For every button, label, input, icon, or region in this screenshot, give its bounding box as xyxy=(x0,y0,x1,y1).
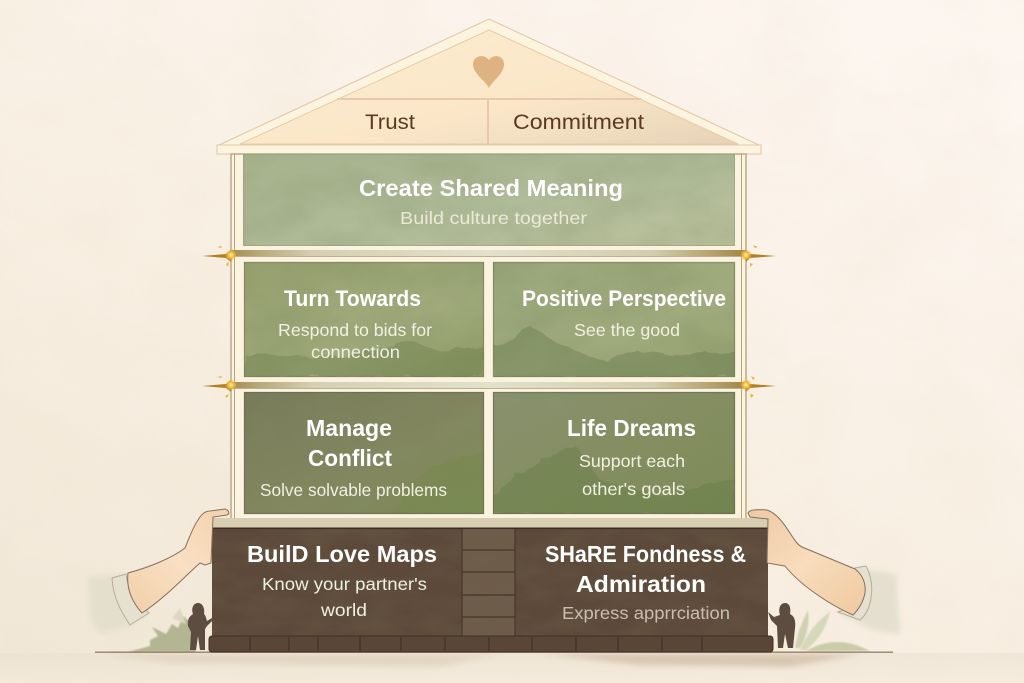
right arm and hand xyxy=(748,510,900,634)
panel: create shared meaning xyxy=(243,154,735,246)
label: commitment: Commitment xyxy=(513,110,644,134)
beam: upper xyxy=(231,250,746,257)
left sleeve xyxy=(88,574,150,634)
wall frame xyxy=(231,154,746,520)
panel: life dreams xyxy=(493,392,735,514)
wall inner post lines xyxy=(234,154,742,518)
panel: positive perspective xyxy=(493,262,735,377)
right sleeve xyxy=(838,566,900,634)
subtext: support each: Support each xyxy=(579,451,685,471)
glint: lower left xyxy=(202,376,237,398)
subtext: know your partner's: Know your partner's xyxy=(262,574,427,594)
roof dividers xyxy=(337,99,641,144)
heading: create shared meaning: Create Shared Meaning xyxy=(359,175,623,201)
subtext: respond to bids: Respond to bids for xyxy=(278,320,432,340)
heading: build love maps: BuilD Love Maps xyxy=(247,541,437,567)
subtext: others goals: other's goals xyxy=(582,479,685,499)
glint: lower right xyxy=(740,376,776,398)
figure: left silhouette xyxy=(188,603,214,650)
right arm xyxy=(748,510,865,615)
brick column xyxy=(462,529,515,636)
glint: upper left xyxy=(202,246,237,267)
label: trust: Trust xyxy=(365,110,415,134)
roof xyxy=(217,19,761,154)
heading: admiration: Admiration xyxy=(576,571,706,597)
house xyxy=(209,19,773,652)
heading: positive perspective: Positive Perspective xyxy=(522,286,726,311)
foundation xyxy=(212,528,768,636)
glint: upper right xyxy=(740,245,776,267)
footing stones xyxy=(209,636,773,652)
heading: life dreams: Life Dreams xyxy=(567,415,696,441)
left arm and hand xyxy=(88,509,229,634)
subtext: see the good: See the good xyxy=(574,320,680,340)
sill xyxy=(212,518,768,529)
heading: share fondness: SHaRE Fondness & xyxy=(545,541,746,567)
left arm xyxy=(128,509,229,613)
subtext: express appreciation: Express apprrciation xyxy=(562,603,730,623)
subtext: connection: connection xyxy=(311,342,400,362)
panel: manage conflict xyxy=(244,392,484,514)
foliage: left xyxy=(128,608,196,652)
heading: conflict: Conflict xyxy=(308,445,392,471)
glints on beams xyxy=(202,245,776,398)
icon: heart xyxy=(473,56,504,88)
subtext: build culture together: Build culture together xyxy=(400,208,587,228)
cornice xyxy=(217,145,761,154)
subtext: world: world xyxy=(320,600,367,620)
figure: right silhouette xyxy=(768,603,795,648)
subtext: solve solvable problems: Solve solvable problems xyxy=(260,480,447,500)
beam: lower xyxy=(231,382,746,389)
ground line xyxy=(95,652,893,653)
heading: turn towards: Turn Towards xyxy=(284,286,421,311)
foliage: right xyxy=(795,610,870,651)
heading: manage: Manage xyxy=(306,415,392,441)
panel: turn towards xyxy=(244,262,484,377)
